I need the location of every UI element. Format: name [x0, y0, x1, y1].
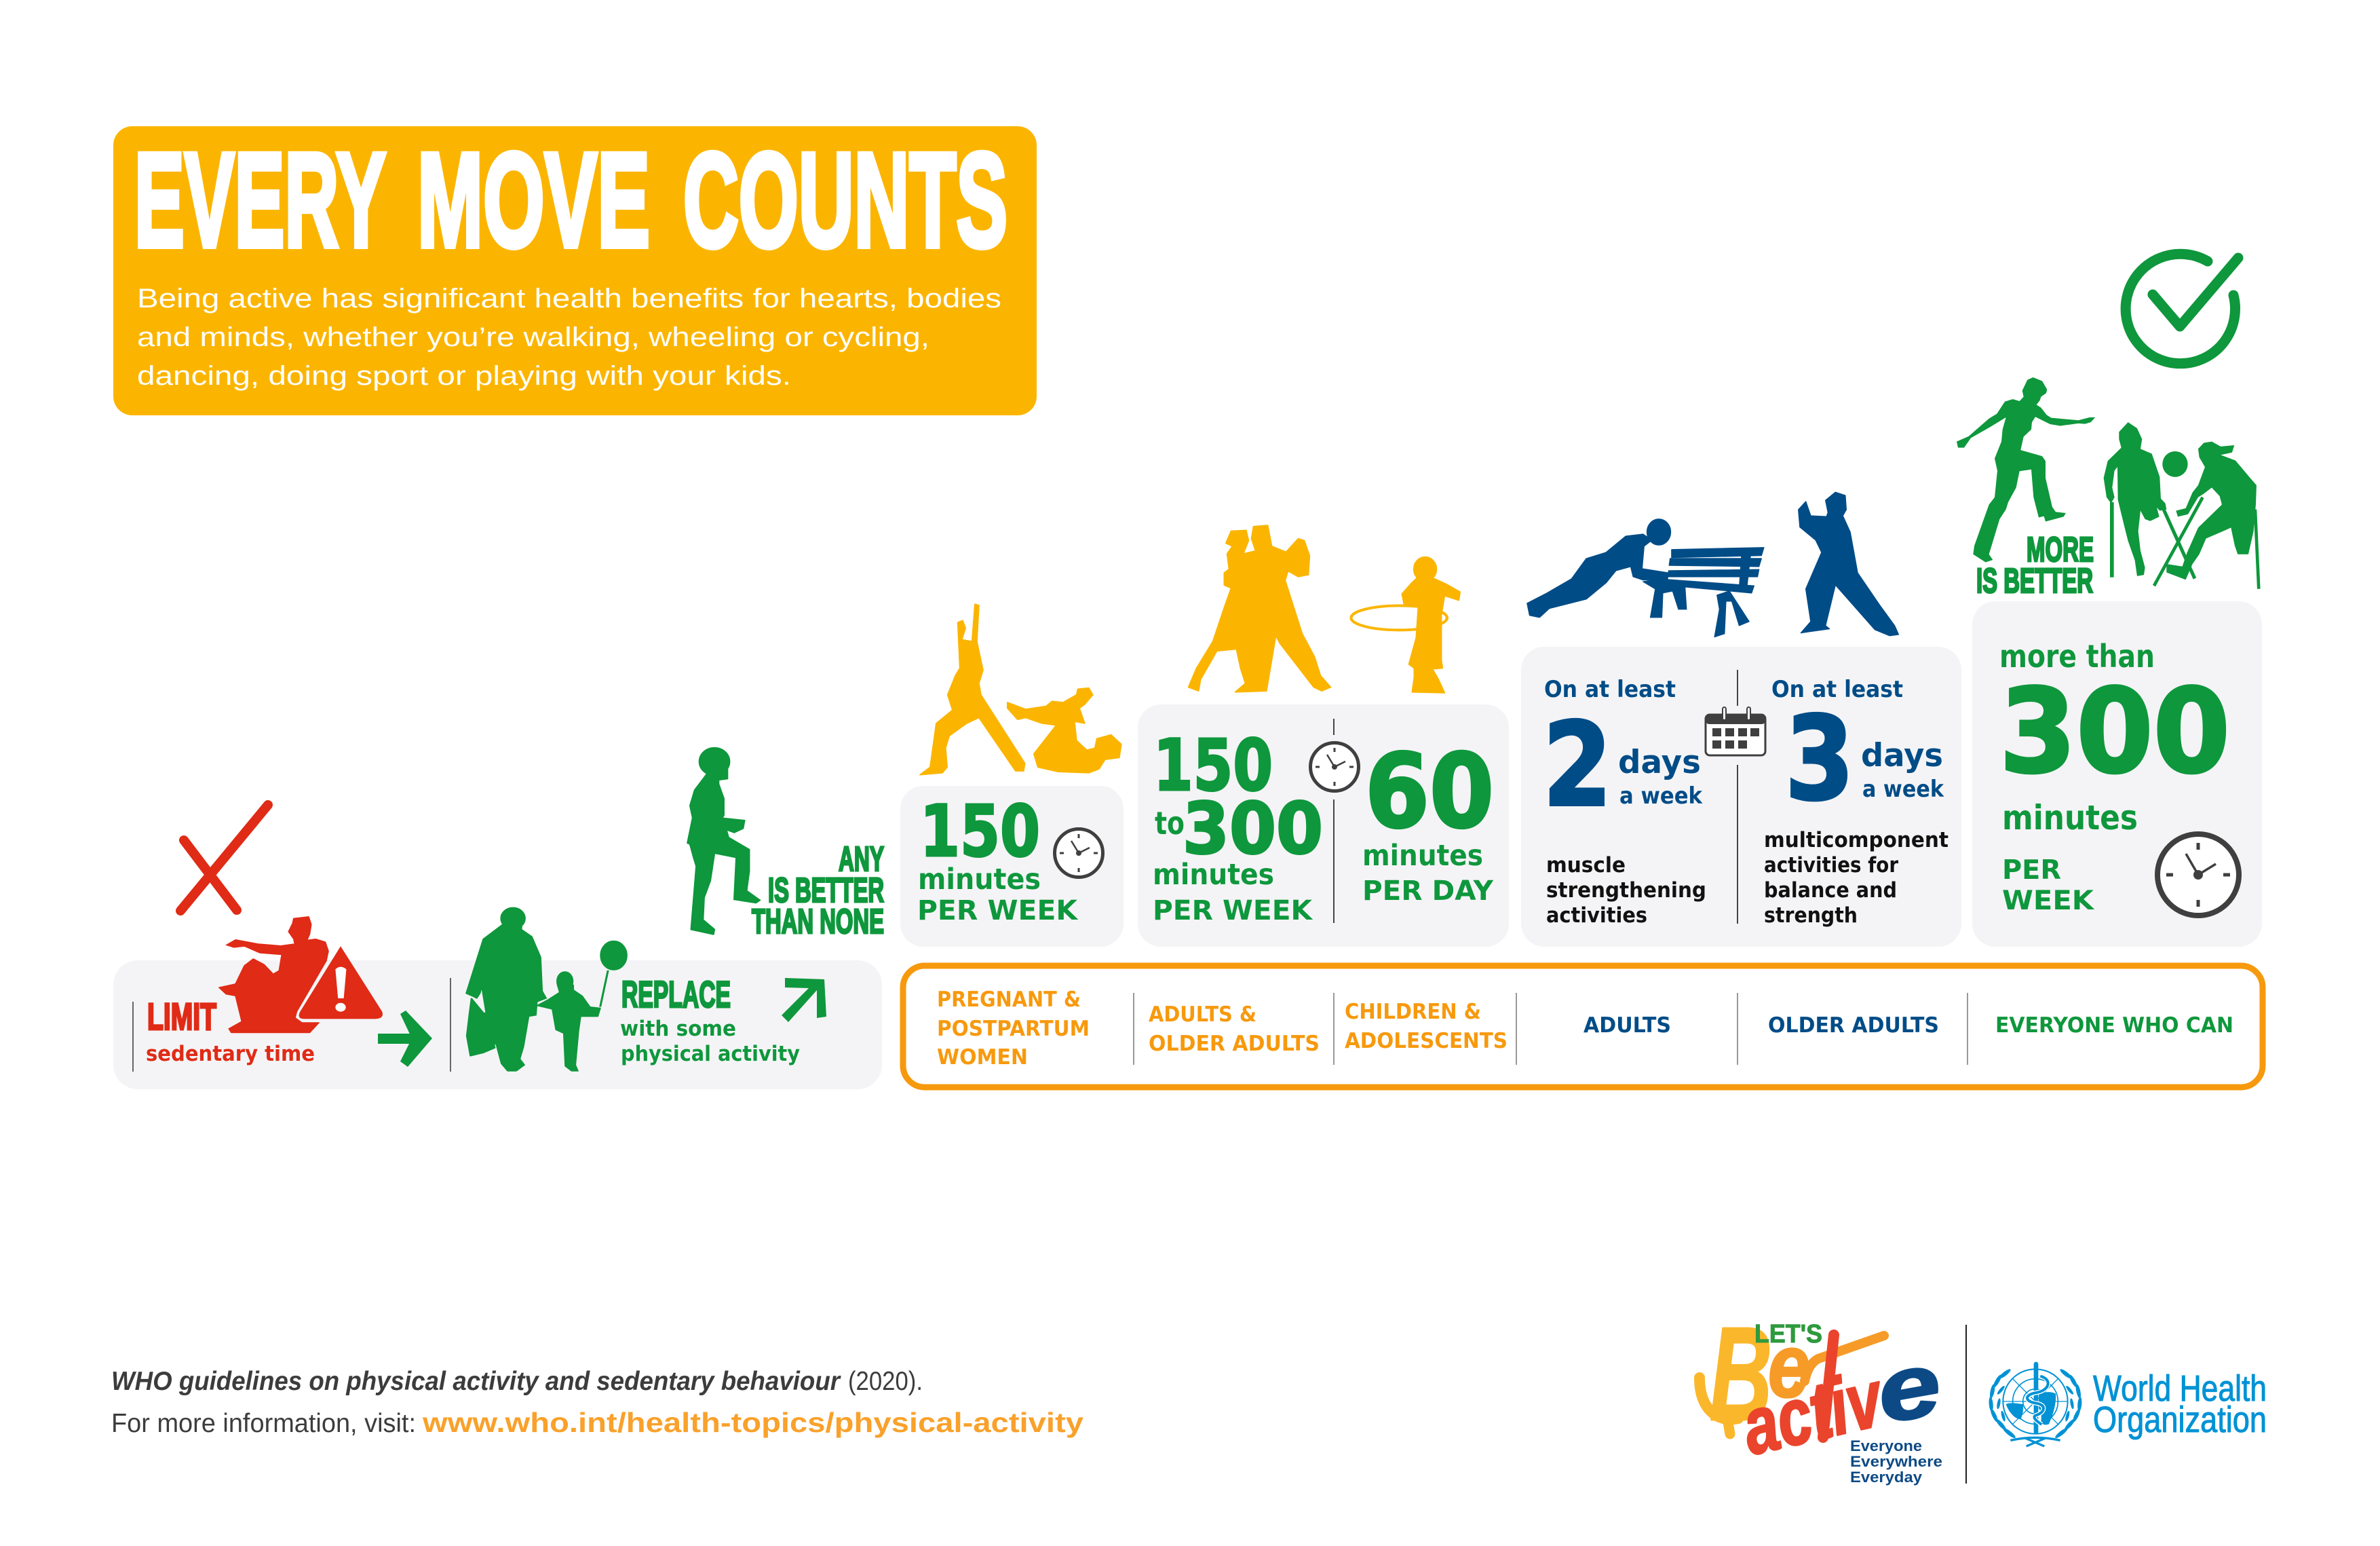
intro text: and minds, whether you’re walking, wheeling or cycling, [137, 322, 929, 352]
label: pregnant and postpartum women [937, 987, 1090, 1070]
label: adults and older adults [1149, 1002, 1320, 1056]
title: EVERY [134, 125, 386, 275]
column: multicomponent: 3 [1785, 692, 1854, 827]
number: 150: 150 [920, 790, 1040, 873]
text: more than: more than [1999, 638, 2155, 675]
logo: let's be active: e [1869, 1333, 1948, 1442]
figure: woman and child with balloon [466, 907, 627, 1071]
text: more is better [1976, 530, 2094, 600]
text: multicomponent activities: balance and [1764, 878, 1897, 903]
text: more is better: IS BETTER [1976, 561, 2093, 600]
icon: calendar [1706, 707, 1765, 755]
figures: more is better group [1957, 377, 2259, 589]
intro text: Being active has significant health benefits for hearts, bodies [137, 284, 1001, 314]
panel: strength and balance [1521, 647, 1961, 947]
text: to: to [1155, 805, 1185, 842]
text: per week [2002, 855, 2095, 916]
text: multicomponent activities: multicomponent [1764, 828, 1949, 852]
column: multicomponent: days [1861, 737, 1943, 774]
text: minutes: minutes [1362, 839, 1483, 873]
figures: yoga, mother and baby [920, 604, 1121, 775]
text: per week: PER [2002, 855, 2061, 886]
icon: red cross [180, 805, 268, 911]
column: multicomponent: On at least [1771, 676, 1903, 703]
text: muscle strengthening activities: activities [1546, 903, 1647, 928]
text: any is better than none: IS BETTER [768, 871, 884, 909]
text: multicomponent activities: strength [1764, 903, 1858, 928]
text: multicomponent activities: activities for [1764, 853, 1899, 878]
label: adults and older adults: ADULTS & [1149, 1002, 1256, 1027]
text: with some physical activity: with some [620, 1017, 736, 1041]
footer: source and link: WHO guidelines on physical activity and sedentary behaviour [111, 1367, 841, 1396]
text: multicomponent activities [1764, 828, 1949, 928]
logo: let's be active: B [1710, 1300, 1772, 1448]
intro text: dancing, doing sport or playing with your kids. [137, 361, 791, 391]
text: minutes: minutes [2002, 798, 2138, 837]
logo: World Health Organization: Organization [2093, 1399, 2267, 1440]
text: any is better than none: THAN NONE [752, 902, 884, 941]
icon: green check [2126, 254, 2238, 364]
logo: World Health Organization [2093, 1368, 2267, 1440]
column: muscle strengthening: On at least [1544, 676, 1676, 703]
label: adults and older adults: OLDER ADULTS [1149, 1032, 1320, 1056]
text: per week: PER WEEK [917, 895, 1079, 926]
logo: let's be active: Everyday [1850, 1469, 1923, 1486]
column: muscle strengthening: a week [1619, 783, 1703, 810]
title [134, 125, 1007, 275]
footer: source and link: www.who.int/health-topics/physical-activity [422, 1407, 1083, 1438]
figures: dancers and hula hoop [1189, 525, 1460, 693]
title: MOVE [417, 125, 650, 275]
figure: tai chi [1799, 492, 1898, 636]
logo: World Health Organization: World Health [2093, 1368, 2267, 1409]
text: sedentary time: sedentary time [146, 1042, 315, 1066]
figure: walking person [687, 747, 760, 935]
text: minutes: minutes [918, 863, 1041, 897]
icon: clock [1311, 742, 1358, 791]
label: children and adolescents [1345, 1000, 1508, 1053]
arrow: up right [782, 978, 826, 1022]
label: pregnant and postpartum women: PREGNANT & [937, 987, 1081, 1012]
intro text [137, 284, 1001, 391]
icon: clock [1054, 829, 1103, 877]
label: children and adolescents: ADOLESCENTS [1345, 1029, 1508, 1053]
text: any is better than none: ANY [839, 840, 884, 878]
column: multicomponent: a week [1862, 776, 1944, 803]
title: COUNTS [683, 125, 1007, 275]
number: 300: 300 [1183, 787, 1323, 870]
figure: sitting person with warning sign [219, 917, 383, 1033]
logo: let's be active: Everywhere [1850, 1453, 1942, 1470]
text: more is better: MORE [2027, 530, 2094, 569]
text: per day: PER DAY [1362, 875, 1494, 907]
text: per week: PER WEEK [1153, 895, 1313, 926]
column: muscle strengthening: days [1618, 744, 1701, 781]
number: 60: 60 [1365, 733, 1494, 851]
column: muscle strengthening: 2 [1543, 698, 1612, 833]
text: muscle strengthening activities: strengthening [1546, 878, 1706, 903]
label: pregnant and postpartum women: POSTPARTUM [937, 1017, 1090, 1041]
logo: let's be active [1700, 1300, 1948, 1486]
logo: let's be active: Everyone [1850, 1437, 1922, 1454]
column: muscle strengthening [1543, 676, 1703, 833]
text: any is better than none [752, 840, 884, 941]
number: 300: 300 [1999, 664, 2230, 799]
text: with some physical activity: physical activity [621, 1042, 800, 1066]
footer: source and link [111, 1367, 1083, 1438]
logo: let's be active: LET'S [1754, 1320, 1822, 1349]
logo: WHO emblem [1989, 1364, 2082, 1446]
text: minutes: minutes [1153, 858, 1274, 892]
footer: source and link: For more information, visit: [111, 1409, 416, 1438]
footer: source and link: (2020). [848, 1367, 923, 1396]
column: multicomponent [1771, 676, 1944, 827]
text: muscle strengthening activities [1546, 853, 1706, 928]
panel: audience labels [903, 966, 2263, 1087]
label: everyone who can: EVERYONE WHO CAN [1995, 1013, 2233, 1038]
heading: limit: LIMIT [147, 995, 216, 1038]
heading: replace: REPLACE [621, 973, 731, 1015]
text: per week: WEEK [2002, 886, 2095, 916]
logo: let's be active: e [1768, 1316, 1810, 1416]
panel: title banner [113, 125, 1037, 415]
figures: push-up on bench [1527, 519, 1764, 637]
label: adults: ADULTS [1584, 1013, 1671, 1038]
label: pregnant and postpartum women: WOMEN [937, 1045, 1028, 1070]
panel: limit and replace [113, 960, 882, 1089]
text: muscle strengthening activities: muscle [1546, 853, 1626, 878]
panel: adults and children minutes [1138, 704, 1509, 947]
number: 150: 150 [1153, 724, 1273, 807]
text: with some physical activity [620, 1017, 800, 1066]
logo: let's be active: activ [1734, 1353, 1893, 1472]
panel: pregnant and postpartum women [900, 786, 1124, 947]
panel: more than 300 [1972, 601, 2262, 947]
icon: clock [2157, 834, 2239, 916]
label: older adults: OLDER ADULTS [1768, 1013, 1939, 1038]
arrow: right [378, 1011, 432, 1067]
label: children and adolescents: CHILDREN & [1345, 1000, 1481, 1024]
